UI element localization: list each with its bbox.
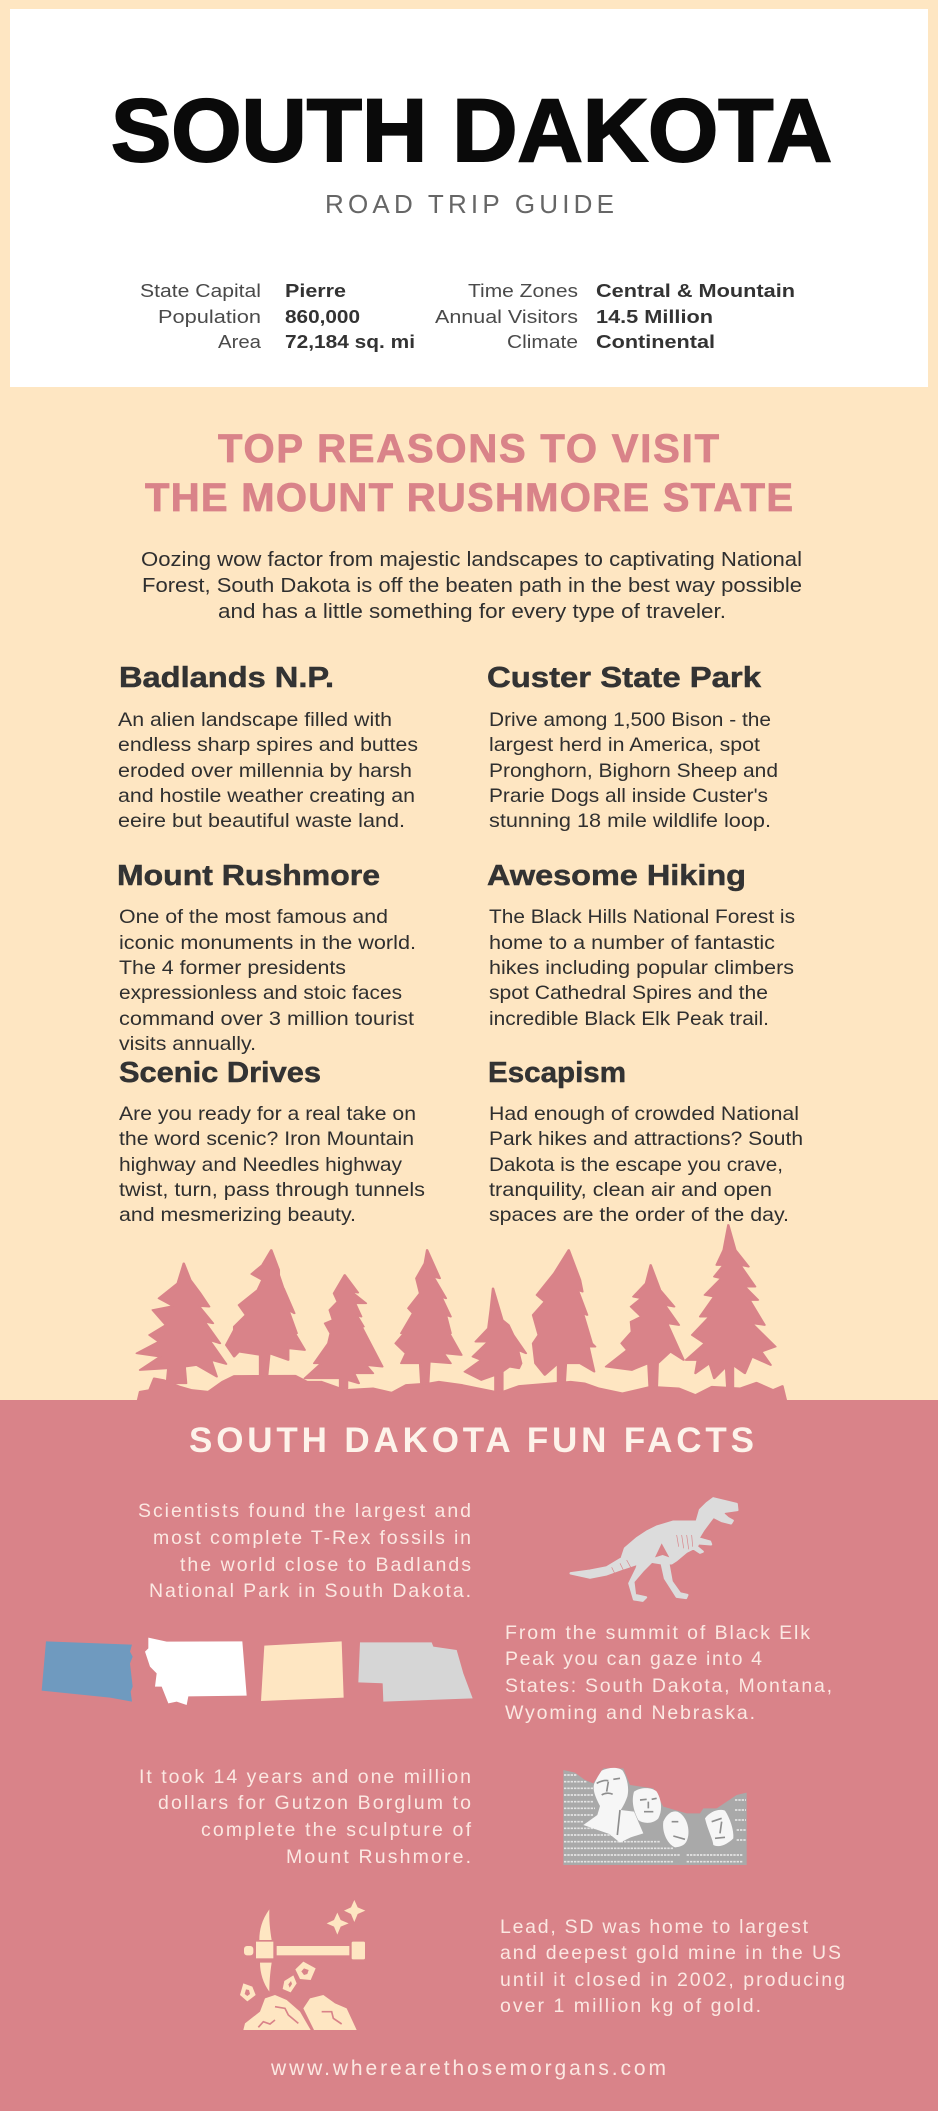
panel: title card	[10, 9, 928, 387]
description: eeire but beautiful waste land.	[118, 810, 405, 832]
fact: Lead gold mine: and deepest gold mine in the US	[500, 1942, 841, 1964]
heading: Scenic Drives	[119, 1057, 321, 1089]
icon: pickaxe and gold nuggets	[240, 1900, 365, 2030]
heading: Escapism	[488, 1057, 626, 1089]
fact: T-Rex fossils	[138, 1500, 471, 1602]
fact: Lead gold mine: Lead, SD was home to largest	[500, 1916, 809, 1938]
icon: Wyoming map	[261, 1641, 344, 1701]
description: stunning 18 mile wildlife loop.	[489, 810, 771, 832]
intro paragraph: Oozing wow factor from majestic landscapes to captivating National	[141, 549, 802, 571]
fact: Gutzon Borglum sculpture: complete the sculpture of	[201, 1819, 472, 1841]
state stats: right column: Climate	[507, 332, 578, 352]
fact: Black Elk Peak: Peak you can gaze into 4	[505, 1648, 762, 1670]
description: One of the most famous and	[119, 906, 388, 928]
state stats: left column: Pierre	[285, 281, 346, 301]
description	[489, 709, 778, 832]
description: endless sharp spires and buttes	[118, 734, 418, 756]
state stats: right column: Time Zones	[468, 281, 578, 301]
fact: Gutzon Borglum sculpture: dollars for Gutzon Borglum to	[158, 1792, 471, 1814]
description: Prarie Dogs all inside Custer's	[489, 785, 768, 807]
description: Pronghorn, Bighorn Sheep and	[489, 760, 778, 782]
state stats: right column: Annual Visitors	[435, 307, 578, 327]
fact: Black Elk Peak: States: South Dakota, Montana,	[505, 1675, 832, 1697]
fact: Gutzon Borglum sculpture: Mount Rushmore.	[286, 1846, 471, 1868]
fact: Gutzon Borglum sculpture	[139, 1766, 472, 1868]
heading: Mount Rushmore	[117, 860, 380, 892]
state stats: left column: State Capital	[140, 281, 261, 301]
fact: T-Rex fossils: the world close to Badlands	[180, 1554, 471, 1576]
description: eroded over millennia by harsh	[118, 760, 412, 782]
panel: Mount Rushmore	[117, 860, 416, 1055]
fact: Lead gold mine: until it closed in 2002, producing	[500, 1969, 845, 1991]
description: spaces are the order of the day.	[489, 1204, 789, 1226]
title: SOUTH DAKOTA	[111, 80, 832, 180]
icon: Nebraska map	[358, 1642, 473, 1702]
description: iconic monuments in the world.	[119, 932, 416, 954]
state stats: left column	[140, 281, 415, 352]
description: incredible Black Elk Peak trail.	[489, 1008, 769, 1030]
description: the word scenic? Iron Mountain	[119, 1128, 414, 1150]
state stats: left column: Area	[218, 332, 262, 352]
description: home to a number of fantastic	[489, 932, 775, 954]
fact: Black Elk Peak: Wyoming and Nebraska.	[505, 1702, 755, 1724]
icon: Mount Rushmore	[563, 1768, 747, 1865]
panel: Awesome Hiking	[487, 860, 795, 1030]
description: tranquility, clean air and open	[489, 1179, 772, 1201]
description: The Black Hills National Forest is	[489, 906, 795, 928]
intro paragraph: Forest, South Dakota is off the beaten path in the best way possible	[142, 575, 802, 597]
section heading: top reasons: THE MOUNT RUSHMORE STATE	[145, 476, 793, 520]
fact: T-Rex fossils: Scientists found the largest and	[138, 1500, 471, 1522]
description: An alien landscape filled with	[118, 709, 392, 731]
description: Are you ready for a real take on	[119, 1103, 416, 1125]
panel: Scenic Drives	[119, 1057, 425, 1226]
description: largest herd in America, spot	[489, 734, 761, 756]
fact: Black Elk Peak: From the summit of Black Elk	[505, 1622, 810, 1644]
description	[119, 1103, 425, 1226]
intro paragraph: and has a little something for every type of traveler.	[218, 601, 726, 623]
fact: Lead gold mine	[500, 1916, 845, 2017]
state stats: right column: Central & Mountain	[596, 281, 795, 301]
description: Drive among 1,500 Bison - the	[489, 709, 771, 731]
description	[118, 709, 418, 832]
description: Park hikes and attractions? South	[489, 1128, 803, 1150]
description	[119, 906, 416, 1055]
description: spot Cathedral Spires and the	[489, 982, 768, 1004]
section heading: top reasons: TOP REASONS TO VISIT	[218, 427, 719, 471]
state stats: left column: 860,000	[285, 307, 360, 327]
fact: Black Elk Peak	[505, 1622, 832, 1724]
icon: T-Rex skeleton	[571, 1498, 737, 1601]
subtitle: ROAD TRIP GUIDE	[325, 189, 614, 219]
page background	[0, 0, 938, 1400]
heading: Awesome Hiking	[487, 860, 746, 892]
state stats: right column: Continental	[596, 332, 715, 352]
fact: Gutzon Borglum sculpture: It took 14 years and one million	[139, 1766, 471, 1788]
panel: Badlands N.P.	[118, 662, 418, 832]
website footer: www.wherearethosemorgans.com	[270, 2057, 666, 2080]
panel: fun facts background	[0, 1400, 938, 2111]
illustration: pine tree treeline	[137, 1225, 786, 1402]
section heading: fun facts: SOUTH DAKOTA FUN FACTS	[189, 1421, 754, 1460]
description: twist, turn, pass through tunnels	[119, 1179, 425, 1201]
description: and mesmerizing beauty.	[119, 1204, 356, 1226]
state stats: right column: 14.5 Million	[596, 307, 713, 327]
description	[489, 1103, 803, 1226]
heading: Custer State Park	[487, 662, 762, 694]
fact: T-Rex fossils: National Park in South Dakota.	[149, 1580, 471, 1602]
description: Dakota is the escape you crave,	[489, 1154, 783, 1176]
description: command over 3 million tourist	[119, 1008, 415, 1030]
icon: four state outlines	[42, 1638, 473, 1705]
fact: T-Rex fossils: most complete T-Rex fossils in	[153, 1527, 471, 1549]
description: Had enough of crowded National	[489, 1103, 799, 1125]
description: hikes including popular climbers	[489, 957, 794, 979]
panel: Escapism	[488, 1057, 803, 1226]
state stats: right column	[435, 281, 795, 352]
description	[489, 906, 795, 1030]
icon: South Dakota map	[42, 1641, 133, 1702]
description: The 4 former presidents	[119, 957, 346, 979]
heading: Badlands N.P.	[119, 662, 334, 694]
description: expressionless and stoic faces	[119, 982, 402, 1004]
fact: Lead gold mine: over 1 million kg of gold.	[500, 1995, 761, 2017]
intro paragraph	[141, 549, 802, 623]
panel: Custer State Park	[487, 662, 778, 832]
description: visits annually.	[119, 1033, 256, 1055]
state stats: left column: 72,184 sq. mi	[285, 332, 415, 352]
icon: Montana map	[145, 1638, 247, 1705]
state stats: left column: Population	[158, 307, 261, 327]
description: highway and Needles highway	[119, 1154, 402, 1176]
section heading: top reasons	[145, 427, 793, 520]
description: and hostile weather creating an	[118, 785, 415, 807]
